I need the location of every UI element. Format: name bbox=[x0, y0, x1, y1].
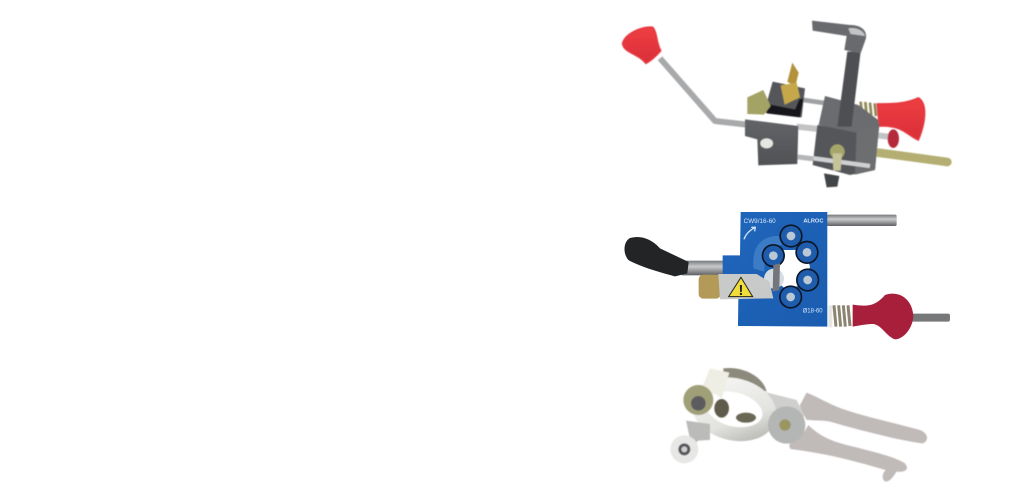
ring body bbox=[693, 377, 775, 441]
block top face bbox=[819, 96, 879, 133]
lower bolt bbox=[824, 173, 839, 187]
back ring bbox=[723, 368, 767, 392]
top guide rod bbox=[827, 215, 897, 226]
brand label: ALROC bbox=[803, 219, 823, 225]
lower grey handle bbox=[789, 425, 907, 482]
side shaft bbox=[682, 261, 725, 275]
bridge to pivot bbox=[763, 392, 805, 417]
white bracket bbox=[703, 368, 729, 398]
red knob bbox=[853, 294, 913, 339]
lever arm bbox=[660, 58, 750, 125]
recess bbox=[753, 236, 782, 272]
blade bbox=[773, 263, 780, 292]
rollers bbox=[762, 224, 819, 309]
size label: Ø18-60 bbox=[803, 308, 823, 314]
knurled knob bbox=[699, 275, 721, 299]
right block bbox=[813, 123, 879, 175]
tool 3: grey-handled ring stripper bbox=[670, 368, 927, 482]
small red knob bbox=[888, 129, 899, 148]
steel plate bbox=[718, 274, 773, 299]
red pusher knob bbox=[877, 98, 925, 140]
center opening bbox=[775, 250, 810, 290]
push-button bbox=[760, 138, 773, 148]
top nut bbox=[683, 385, 713, 415]
black handle bbox=[624, 237, 689, 276]
spring bbox=[828, 305, 850, 327]
block side face bbox=[855, 125, 879, 175]
front roller bbox=[670, 421, 710, 463]
threaded rod bbox=[910, 314, 950, 322]
icon: rotation arrow bbox=[744, 227, 755, 239]
brass fitting bbox=[781, 63, 800, 105]
left block bbox=[745, 119, 798, 165]
vertical crank handle bbox=[812, 21, 866, 127]
warning sign bbox=[729, 277, 753, 299]
blue body bbox=[723, 212, 827, 327]
pivot bolt bbox=[779, 419, 791, 431]
cross rod with fitting bbox=[813, 144, 870, 171]
guide rods bbox=[795, 100, 888, 166]
white roller bbox=[764, 269, 784, 289]
spring bbox=[861, 102, 876, 116]
upper grey handle bbox=[800, 393, 927, 443]
model label: CW9/16-60 bbox=[744, 218, 776, 225]
rear body block bbox=[764, 82, 805, 117]
inner rollers bbox=[714, 399, 756, 423]
threaded collar bbox=[747, 90, 771, 115]
tool 1: red-handled cable stripper bbox=[623, 21, 947, 187]
brass rod bbox=[878, 153, 947, 162]
red lever knob bbox=[623, 27, 661, 63]
tool 2: blue ALROC stripper bbox=[624, 212, 950, 339]
pivot disc bbox=[768, 406, 805, 444]
warning sign: ! bbox=[739, 283, 743, 299]
black clamp bbox=[767, 98, 803, 117]
